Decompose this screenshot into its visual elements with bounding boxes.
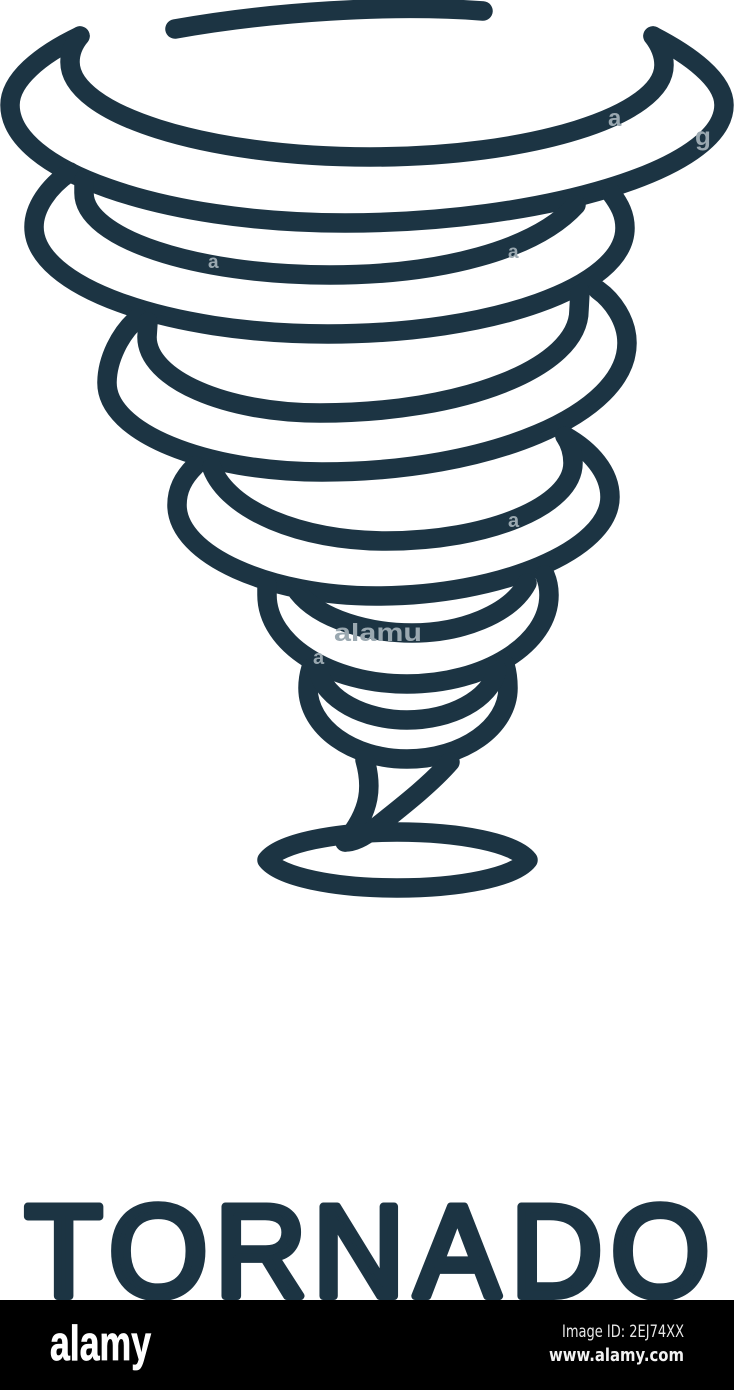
watermark fragments: a [313,647,325,669]
footer logo: alamy [50,1317,151,1371]
ring 3 [107,290,627,472]
watermark fragments: g [695,121,711,151]
ring 1: top crescent [10,36,724,223]
watermark fragments: a [608,105,622,132]
watermark fragments: a [508,510,520,532]
image id: Image ID: 2EJ74XX [562,1322,684,1342]
footer band [0,1300,734,1390]
title: TORNADO [25,1180,710,1324]
watermark fragments [208,105,711,669]
funnel stem [345,760,450,842]
top wind stroke [175,8,483,29]
icon: tornado [10,8,724,888]
ring 2 [34,172,625,334]
watermark fragments: alamu [334,619,422,647]
watermark fragments: a [208,252,219,273]
ring 4 [177,436,610,596]
website: www.alamy.com [549,1345,684,1366]
ground ellipse [267,832,528,888]
ring 6 [308,665,508,759]
ring 5 [267,575,549,684]
watermark fragments: a [508,242,519,263]
